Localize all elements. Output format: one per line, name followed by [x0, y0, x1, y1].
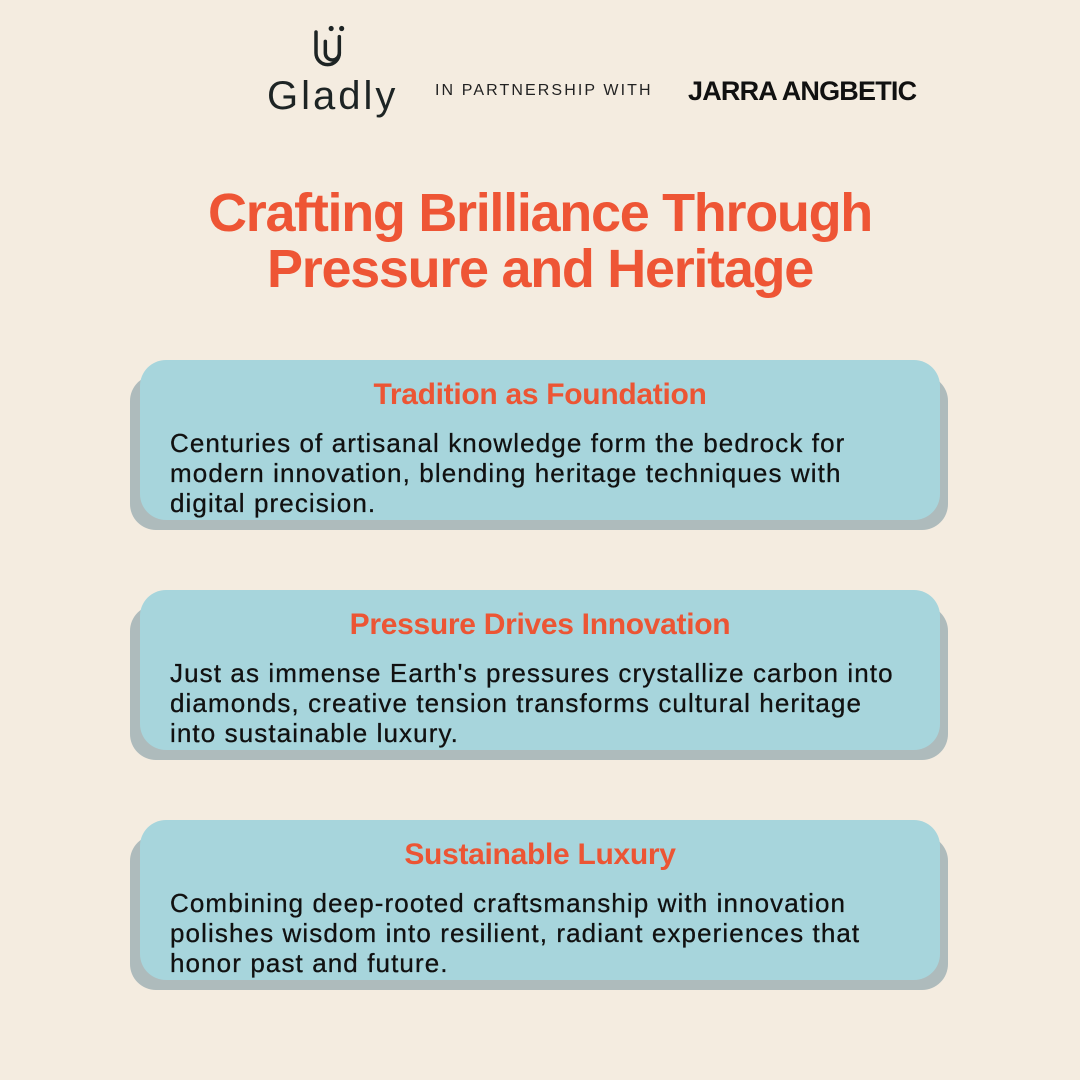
panel: sustainable — [130, 820, 948, 990]
body text — [170, 428, 845, 518]
logo: Gladly — [267, 26, 398, 118]
icon: gladly mark — [314, 26, 344, 66]
body text: into sustainable luxury. — [170, 718, 459, 748]
text: Gladly: Gladly — [267, 74, 398, 118]
body text: digital precision. — [170, 488, 376, 518]
title: Crafting Brilliance Through — [208, 183, 872, 243]
partnership text: IN PARTNERSHIP WITH — [435, 82, 653, 99]
body text: polishes wisdom into resilient, radiant experiences that — [170, 918, 860, 948]
panel: tradition — [130, 360, 948, 530]
heading: Pressure Drives Innovation — [350, 608, 730, 641]
heading: Tradition as Foundation — [373, 378, 707, 411]
title: Pressure and Heritage — [267, 239, 813, 299]
title — [208, 183, 872, 299]
body text: Combining deep-rooted craftsmanship with innovation — [170, 888, 846, 918]
body text: Just as immense Earth's pressures crystallize carbon into — [170, 658, 894, 688]
body text — [170, 658, 894, 748]
body text: honor past and future. — [170, 948, 449, 978]
body text: diamonds, creative tension transforms cultural heritage — [170, 688, 862, 718]
partner name: JARRA ANGBETIC — [688, 76, 916, 106]
body text — [170, 888, 860, 978]
panel: pressure — [130, 590, 948, 760]
body text: modern innovation, blending heritage techniques with — [170, 458, 842, 488]
body text: Centuries of artisanal knowledge form the bedrock for — [170, 428, 845, 458]
heading: Sustainable Luxury — [404, 838, 676, 871]
